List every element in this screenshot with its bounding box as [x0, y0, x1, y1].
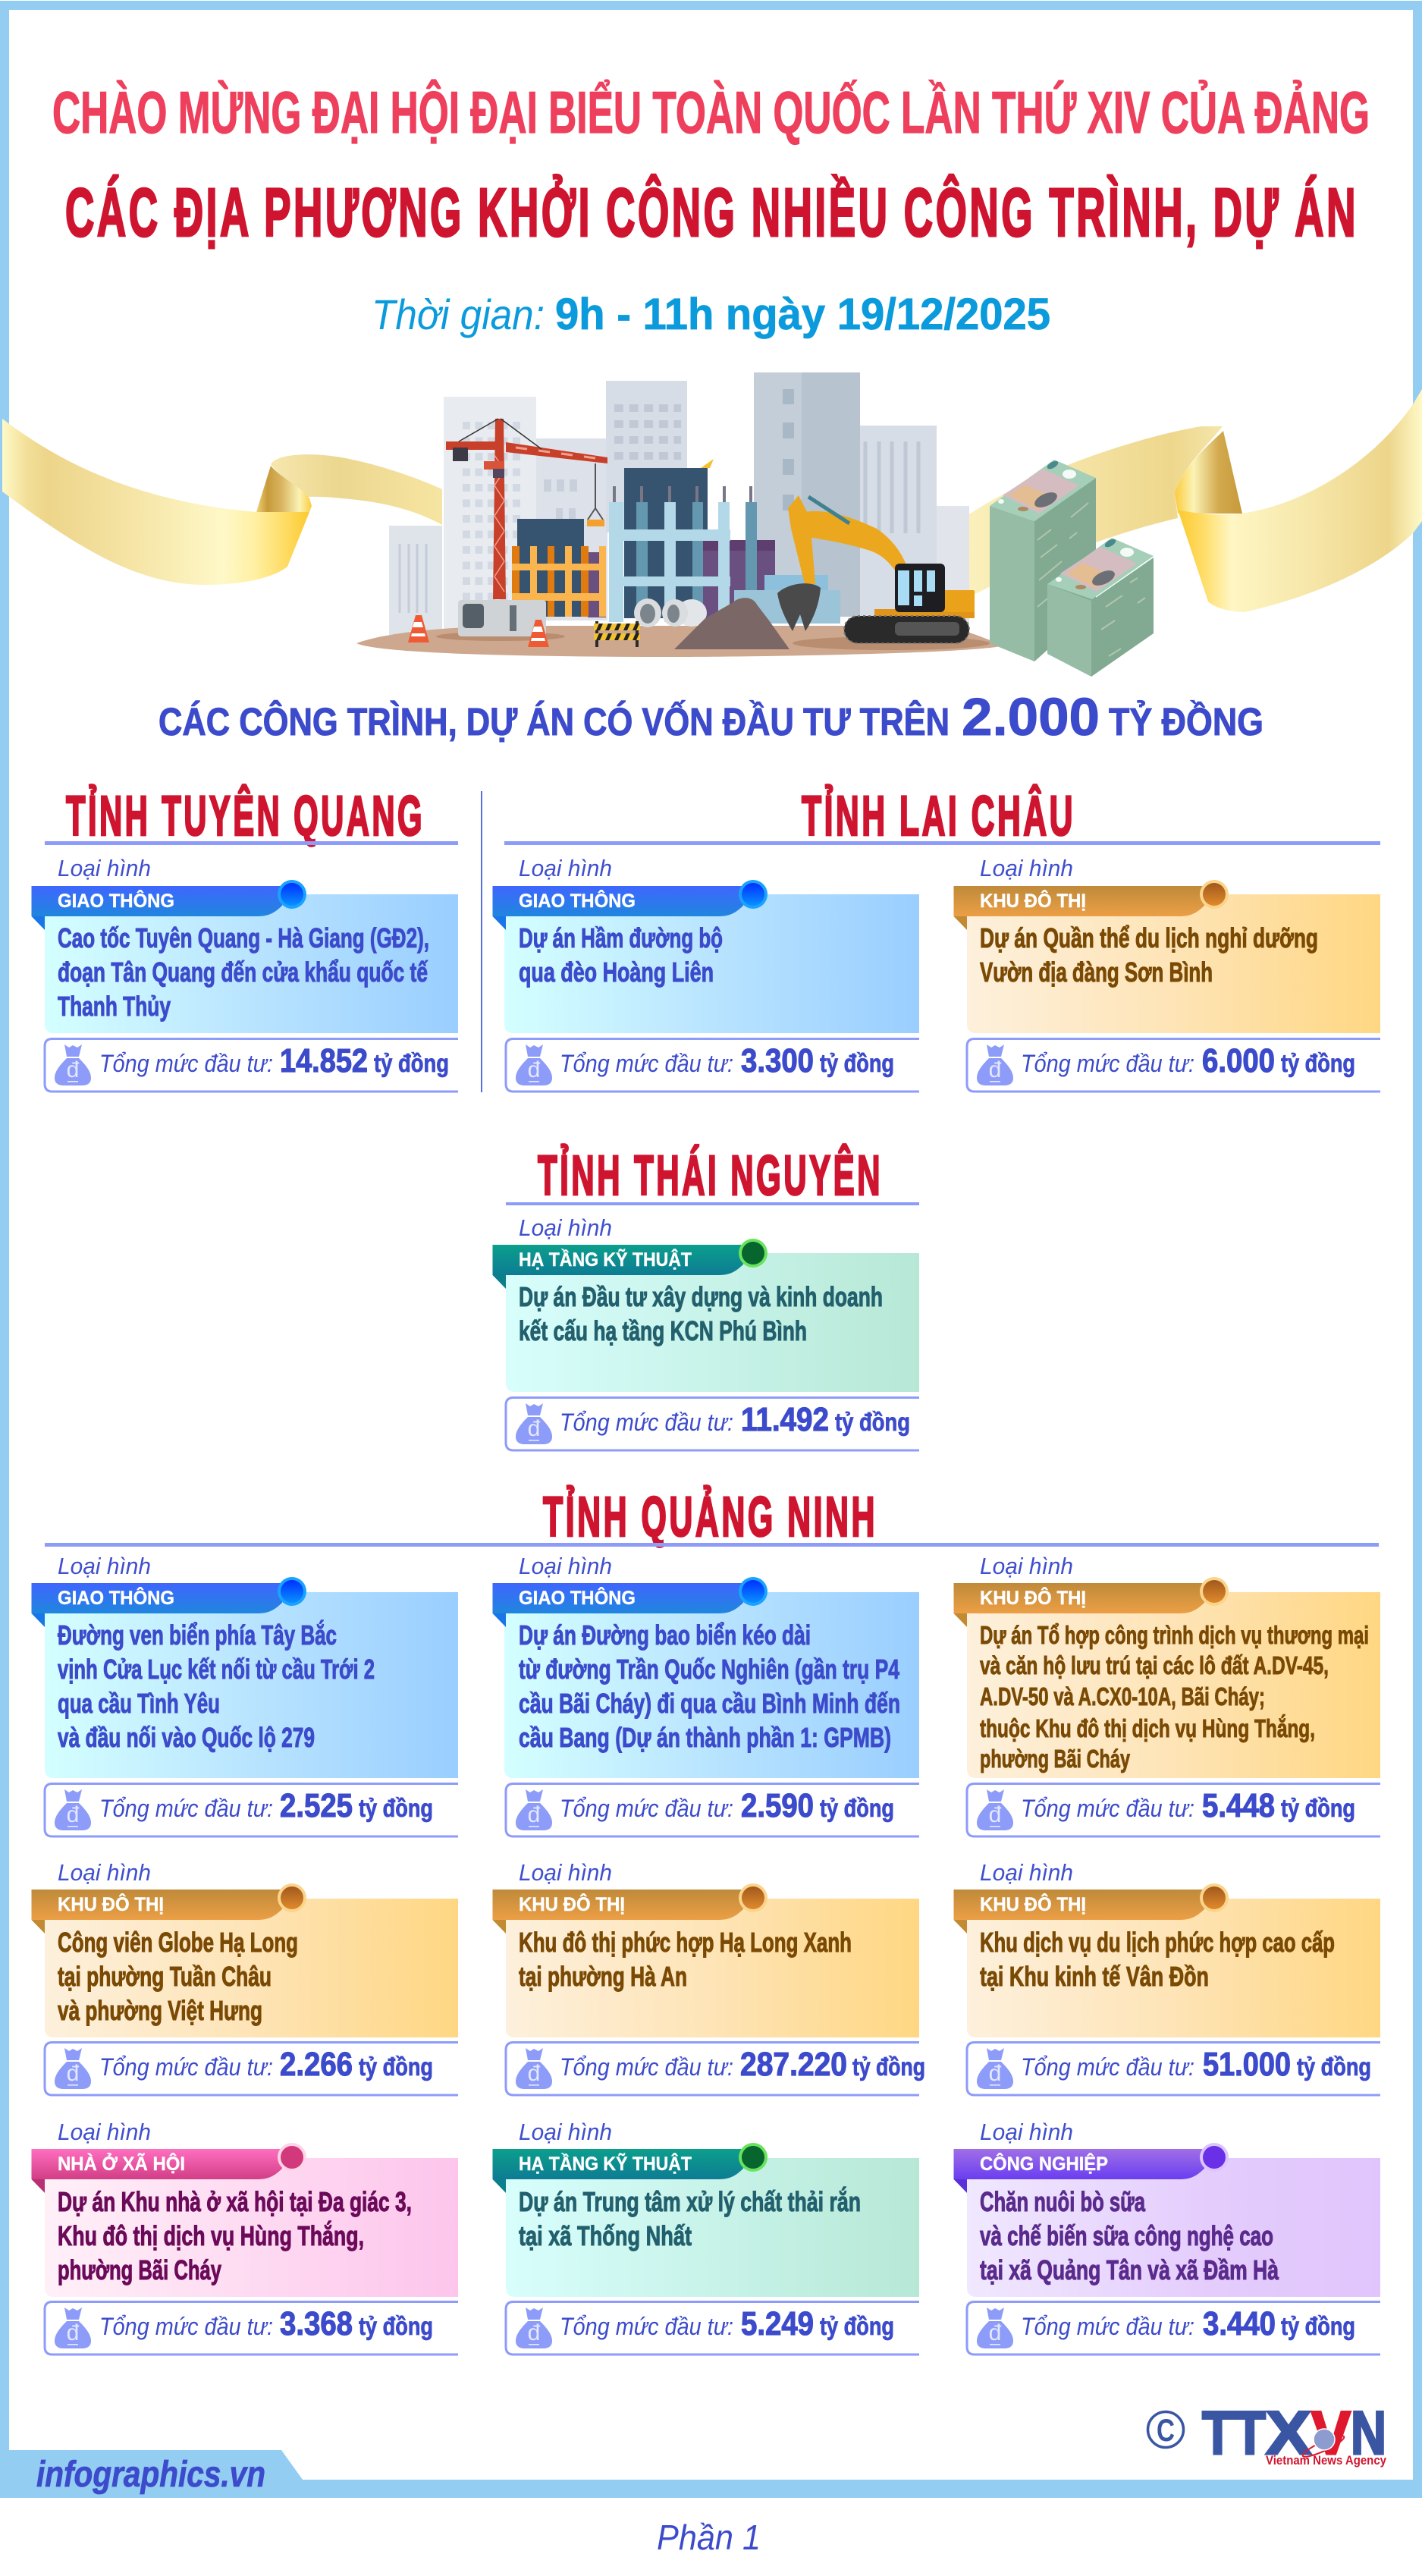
investment amount: Tổng mức đầu tư:	[1021, 1050, 1194, 1077]
investment amount: đ	[989, 2320, 1002, 2345]
type label and tag: Loại hình	[980, 1553, 1073, 1579]
type label and tag	[32, 855, 306, 930]
investment amount	[967, 2301, 1380, 2355]
project name: tại phường Tuần Châu	[58, 1961, 272, 1992]
type label and tag: Loại hình	[519, 855, 612, 881]
heading: Thái Nguyên	[506, 1144, 919, 1207]
investment amount	[45, 1784, 458, 1836]
investment amount	[967, 2042, 1380, 2095]
type label and tag: HẠ TẦNG KỸ THUẬT	[519, 1248, 692, 1271]
ribbon front: left	[2, 419, 312, 585]
investment amount	[506, 1039, 919, 1092]
project name	[980, 2186, 1279, 2285]
project name: Đường ven biển phía Tây Bắc	[58, 1619, 337, 1651]
card: dairy farming and processing	[954, 2119, 1380, 2355]
investment amount: tỷ đồng	[1281, 1794, 1355, 1822]
concrete pipes	[458, 598, 707, 636]
investment amount: Tổng mức đầu tư:	[560, 1050, 733, 1077]
investment amount	[506, 2042, 925, 2095]
project name: và phường Việt Hưng	[58, 1995, 262, 2026]
type label and tag: KHU ĐÔ THỊ	[980, 1586, 1086, 1609]
type label and tag: Loại hình	[519, 1859, 612, 1886]
type label and tag	[32, 1553, 306, 1627]
type label and tag	[954, 1859, 1229, 1934]
type label and tag	[32, 2119, 306, 2193]
project name: cầu Bãi Cháy) đi qua cầu Bình Minh đến	[519, 1688, 900, 1719]
project name: qua cầu Tình Yêu	[58, 1688, 220, 1719]
investment amount: tỷ đồng	[852, 2053, 925, 2081]
investment amount: đ	[528, 1416, 541, 1441]
project name: Dự án Trung tâm xử lý chất thải rắn	[519, 2185, 861, 2217]
investment amount: 2.590	[741, 1787, 814, 1824]
project name	[519, 1927, 852, 1992]
investment amount	[506, 2301, 919, 2355]
barrier	[594, 621, 640, 647]
card: Đa giác 3 social housing	[32, 2119, 458, 2355]
type label and tag	[954, 855, 1229, 930]
investment amount	[506, 1784, 919, 1836]
type label and tag: Loại hình	[519, 2119, 612, 2145]
project name	[980, 922, 1318, 988]
project name: Thanh Thủy	[58, 991, 171, 1022]
investment amount: Tổng mức đầu tư:	[560, 1409, 733, 1436]
TTXVN wordmark: V	[1311, 2399, 1351, 2468]
investment amount: đ	[67, 2061, 80, 2086]
investment amount: Tổng mức đầu tư:	[99, 1795, 273, 1822]
project name: Vườn địa đàng Sơn Bình	[980, 957, 1213, 988]
project name: Dự án Hầm đường bộ	[519, 922, 723, 953]
investment amount: Tổng mức đầu tư:	[560, 1795, 733, 1822]
project name	[58, 1927, 298, 2026]
type label and tag: GIAO THÔNG	[58, 1586, 174, 1609]
project name: Công viên Globe Hạ Long	[58, 1927, 298, 1958]
investment amount: tỷ đồng	[1281, 2312, 1355, 2340]
building under construction: left	[512, 519, 606, 617]
investment amount: 5.249	[741, 2305, 814, 2342]
project name: kết cấu hạ tầng KCN Phú Bình	[519, 1315, 807, 1346]
investment amount	[967, 1039, 1380, 1092]
copyright mark: C	[1157, 2412, 1175, 2448]
type label and tag: KHU ĐÔ THỊ	[980, 1893, 1086, 1915]
investment amount: 3.368	[280, 2305, 353, 2342]
city buildings	[389, 372, 969, 635]
investment amount	[45, 1039, 458, 1092]
type label and tag: Loại hình	[980, 855, 1073, 881]
type label and tag	[32, 1859, 306, 1934]
investment amount: đ	[989, 1057, 1002, 1082]
investment amount: Tổng mức đầu tư:	[1021, 1795, 1194, 1822]
project name	[519, 2185, 861, 2251]
investment amount: tỷ đồng	[359, 2312, 433, 2340]
heading: Tuyên Quang: TỈNH TUYÊN QUANG	[66, 784, 425, 847]
type label and tag: NHÀ Ở XÃ HỘI	[58, 2152, 185, 2175]
card: solid waste treatment centre	[493, 2119, 919, 2355]
TTXVN wordmark: T	[1234, 2399, 1266, 2468]
type label and tag: Loại hình	[58, 855, 151, 881]
investment amount: đ	[67, 2320, 80, 2345]
subtitle: time: Thời gian:	[372, 291, 545, 338]
copyright and TTXVN logo: Vietnam News Agency	[1266, 2453, 1386, 2468]
investment amount: Tổng mức đầu tư:	[99, 2053, 273, 2081]
project name: đoạn Tân Quang đến cửa khẩu quốc tế	[58, 957, 428, 988]
ground	[356, 626, 1001, 657]
type label and tag: Loại hình	[519, 1553, 612, 1579]
project name	[519, 922, 723, 988]
investment amount: tỷ đồng	[1297, 2053, 1371, 2081]
investment amount: Tổng mức đầu tư:	[560, 2313, 733, 2340]
subtitle: time: 9h - 11h ngày 19/12/2025	[555, 290, 1050, 339]
investment amount: 3.440	[1203, 2305, 1276, 2342]
investment amount	[506, 1397, 919, 1450]
project name: phường Bãi Cháy	[58, 2254, 221, 2285]
dirt mound	[674, 598, 789, 649]
type label and tag: Loại hình	[980, 1859, 1073, 1886]
type label and tag: GIAO THÔNG	[519, 889, 636, 912]
investment amount: tỷ đồng	[359, 2053, 433, 2081]
type label and tag: GIAO THÔNG	[58, 889, 174, 912]
investment amount: 14.852	[280, 1042, 368, 1079]
type label and tag: Loại hình	[58, 1859, 151, 1886]
building under construction: centre	[609, 459, 840, 624]
project name: Khu đô thị phức hợp Hạ Long Xanh	[519, 1927, 852, 1958]
type label and tag: KHU ĐÔ THỊ	[519, 1893, 625, 1915]
ribbon back strips	[271, 426, 1223, 597]
investment amount: 287.220	[740, 2046, 847, 2083]
project name: tại xã Quảng Tân và xã Đầm Hà	[980, 2254, 1279, 2285]
heading: Lai Châu: TỈNH LAI CHÂU	[802, 784, 1075, 847]
project name	[58, 2186, 412, 2285]
investment amount: 5.448	[1202, 1787, 1275, 1824]
investment amount: đ	[989, 1802, 1002, 1827]
heading: Thái Nguyên: TỈNH THÁI NGUYÊN	[538, 1144, 883, 1207]
investment amount: tỷ đồng	[374, 1049, 449, 1077]
crane	[446, 419, 607, 599]
project name: Chăn nuôi bò sữa	[980, 2186, 1146, 2217]
card: Hoàng Liên tunnel	[493, 855, 919, 1092]
type label and tag	[493, 2119, 768, 2193]
ribbon front: right	[1175, 389, 1422, 612]
card: Vân Đồn tourism complex	[954, 1859, 1380, 2095]
project name: từ đường Trần Quốc Nghiên (gần trụ P4	[519, 1654, 899, 1685]
investment amount: đ	[67, 1057, 80, 1082]
investment amount: đ	[528, 2061, 541, 2086]
type label and tag	[493, 1214, 768, 1289]
investment amount: đ	[528, 1802, 541, 1827]
project name: Cao tốc Tuyên Quang - Hà Giang (GĐ2),	[58, 922, 429, 953]
type label and tag: Loại hình	[980, 2119, 1073, 2145]
heading: Tuyên Quang	[45, 784, 458, 847]
type label and tag	[954, 1553, 1229, 1627]
type label and tag: Loại hình	[58, 2119, 151, 2145]
heading: Lai Châu	[504, 784, 1380, 847]
TTXVN wordmark: T	[1202, 2399, 1233, 2468]
copyright mark	[1148, 2412, 1183, 2448]
investment amount	[967, 1784, 1380, 1836]
small stack	[1047, 538, 1154, 677]
type label and tag: GIAO THÔNG	[519, 1586, 636, 1609]
type label and tag: CÔNG NGHIỆP	[980, 2152, 1108, 2175]
investment amount	[45, 2301, 458, 2355]
type label and tag: HẠ TẦNG KỸ THUẬT	[519, 2152, 692, 2175]
investment amount: tỷ đồng	[835, 1408, 910, 1436]
heading: Quảng Ninh	[45, 1485, 1379, 1548]
type label and tag	[493, 855, 768, 930]
section heading: projects over 2.000 billion: 2.000	[962, 687, 1100, 746]
investment amount: 2.266	[280, 2046, 353, 2083]
investment amount: 3.300	[741, 1042, 814, 1079]
project name: Dự án Khu nhà ở xã hội tại Đa giác 3,	[58, 2186, 412, 2217]
project name	[980, 1927, 1335, 1992]
TTXVN wordmark: X	[1266, 2399, 1311, 2468]
type label and tag	[954, 2119, 1229, 2193]
investment amount: 51.000	[1203, 2046, 1291, 2083]
investment amount: 11.492	[741, 1401, 829, 1438]
project name: và đầu nối vào Quốc lộ 279	[58, 1722, 315, 1753]
type label and tag	[493, 1553, 768, 1627]
investment amount: tỷ đồng	[359, 1794, 433, 1822]
project name: vịnh Cửa Lục kết nối từ cầu Trới 2	[58, 1654, 375, 1685]
card: Cửa Lục coastal road	[32, 1553, 458, 1836]
part label: Phần 1	[657, 2518, 761, 2557]
project name: cầu Bang (Dự án thành phần 1: GPMB)	[519, 1722, 891, 1753]
project name: tại Khu kinh tế Vân Đồn	[980, 1961, 1209, 1992]
project name	[980, 1621, 1369, 1773]
investment amount: Tổng mức đầu tư:	[560, 2053, 733, 2081]
investment amount: tỷ đồng	[820, 1794, 894, 1822]
section heading: projects over 2.000 billion: TỶ ĐỒNG	[1109, 699, 1263, 743]
project name: Dự án Đường bao biển kéo dài	[519, 1619, 811, 1651]
traffic cones	[408, 615, 549, 647]
project name: và chế biến sữa công nghệ cao	[980, 2220, 1273, 2251]
heading: Quảng Ninh: TỈNH QUẢNG NINH	[543, 1485, 877, 1548]
copyright and TTXVN logo	[1148, 2399, 1386, 2468]
type label and tag: KHU ĐÔ THỊ	[980, 889, 1086, 912]
project name	[58, 1619, 375, 1753]
investment amount: tỷ đồng	[820, 2312, 894, 2340]
large stack	[990, 460, 1096, 661]
project name: Khu đô thị dịch vụ Hùng Thắng,	[58, 2219, 364, 2251]
type label and tag	[493, 1859, 768, 1934]
card: Phú Bình industrial park	[493, 1214, 919, 1450]
project name: phường Bãi Cháy	[980, 1745, 1130, 1773]
project name: A.DV-50 và A.CX0-10A, Bãi Cháy;	[980, 1682, 1265, 1711]
card: Tuyên Quang expressway	[32, 855, 458, 1092]
TTXVN wordmark: N	[1351, 2399, 1386, 2468]
investment amount	[45, 2042, 458, 2095]
investment amount: đ	[67, 1802, 80, 1827]
investment amount: 2.525	[280, 1787, 353, 1824]
investment amount: Tổng mức đầu tư:	[1021, 2313, 1194, 2340]
illustration: ribbon, construction site and money	[2, 372, 1422, 677]
project name	[519, 1281, 883, 1346]
type label and tag: Loại hình	[519, 1214, 612, 1241]
investment amount: tỷ đồng	[820, 1049, 894, 1077]
type label and tag: Loại hình	[58, 1553, 151, 1579]
card: Vườn địa đàng Sơn Bình resort	[954, 855, 1380, 1092]
project name: tại phường Hà An	[519, 1961, 687, 1992]
investment amount: tỷ đồng	[1281, 1049, 1355, 1077]
project name	[58, 922, 429, 1022]
project name: Dự án Đầu tư xây dựng và kinh doanh	[519, 1281, 883, 1312]
type label and tag: KHU ĐÔ THỊ	[58, 1893, 164, 1915]
investment amount: đ	[989, 2061, 1002, 2086]
project name: tại xã Thống Nhất	[519, 2220, 692, 2251]
investment amount: Tổng mức đầu tư:	[1021, 2053, 1194, 2081]
investment amount: 6.000	[1202, 1042, 1275, 1079]
card: coastal ring road	[493, 1553, 919, 1836]
investment amount: đ	[528, 2320, 541, 2345]
investment amount: Tổng mức đầu tư:	[99, 2313, 273, 2340]
project name: qua đèo Hoàng Liên	[519, 957, 714, 988]
money stacks	[990, 460, 1154, 677]
section heading: projects over 2.000 billion: CÁC CÔNG TRÌNH, DỰ ÁN CÓ VỐN ĐẦU TƯ TRÊN	[159, 699, 950, 743]
card: Globe Hạ Long park	[32, 1859, 458, 2095]
TTXVN wordmark	[1202, 2399, 1386, 2468]
card: Hạ Long Xanh urban area	[493, 1859, 925, 2095]
excavator	[777, 495, 975, 643]
investment amount: Tổng mức đầu tư:	[99, 1050, 273, 1077]
project name: thuộc Khu đô thị dịch vụ Hùng Thắng,	[980, 1714, 1315, 1742]
section heading: projects over 2.000 billion	[159, 687, 1263, 746]
investment amount: đ	[528, 1057, 541, 1082]
footer site name: infographics.vn	[36, 2455, 265, 2495]
project name	[519, 1619, 900, 1753]
card: commercial service complex	[954, 1553, 1380, 1836]
